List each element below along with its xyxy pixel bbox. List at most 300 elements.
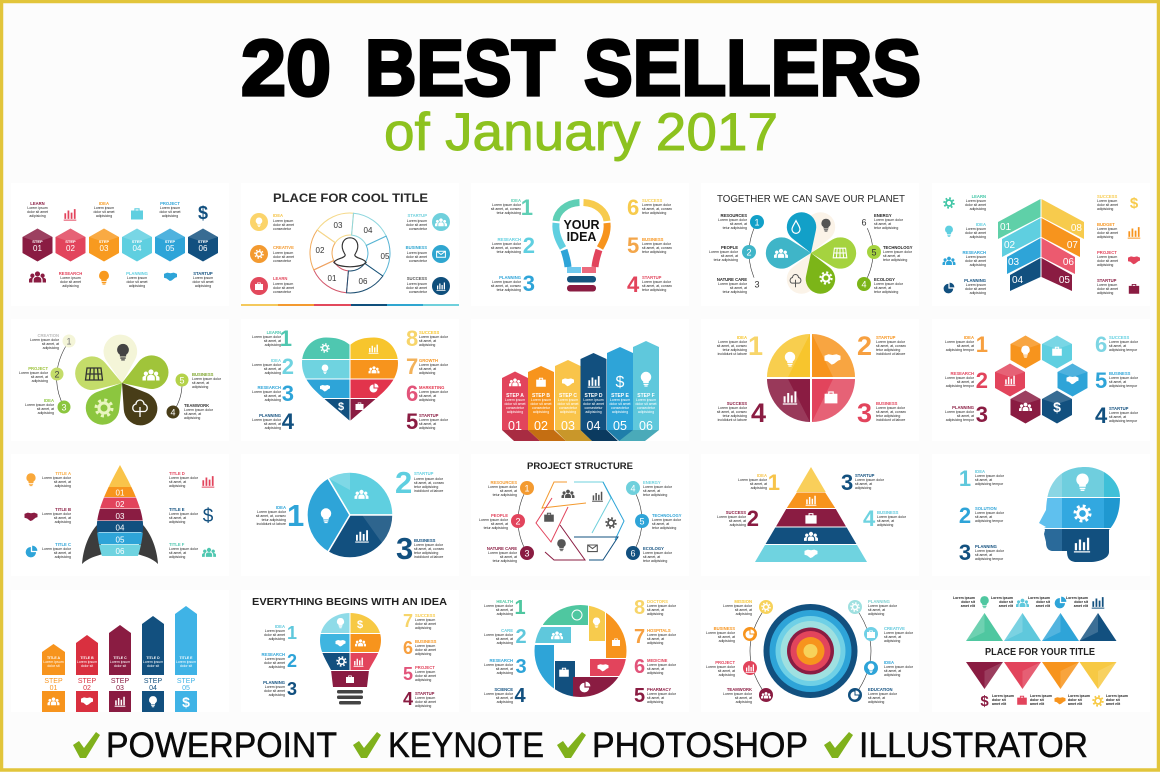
- right items: sit amet, at: [419, 339, 436, 343]
- left chevron stripes: 02: [1004, 240, 1016, 251]
- left items: 1: [514, 597, 526, 619]
- right items: SUCCESS: [1097, 194, 1117, 199]
- bottom icons and labels: dolor sit: [1068, 698, 1083, 702]
- left items: sit amet, at: [730, 222, 747, 226]
- item 1 idea: 1: [768, 470, 780, 495]
- bottom icons and labels: amet elit: [1030, 702, 1045, 706]
- right items: 4: [1095, 403, 1108, 428]
- left items: sit amet, at: [957, 380, 974, 384]
- panel: three-part pie: [241, 454, 459, 576]
- right items: adipisicing: [647, 671, 663, 675]
- left items: 4: [282, 409, 295, 434]
- left items: 2: [515, 516, 521, 526]
- right items: 7: [403, 611, 413, 631]
- item 4 business: [863, 506, 907, 531]
- left items: sit amet, at: [730, 286, 747, 290]
- right items: PHARMACY: [647, 687, 671, 692]
- numbered items: Lorem ipsum dolor: [30, 338, 59, 342]
- right items: [857, 213, 913, 294]
- left items: tetur adipisicing: [723, 226, 747, 230]
- panel: rocket: [24, 465, 216, 564]
- left items: 1: [754, 218, 760, 228]
- right items: dolor sit amet: [415, 648, 436, 652]
- bulb socket: [567, 276, 596, 292]
- right items: Lorem ipsum: [1097, 255, 1117, 259]
- six hexagons: [995, 336, 1088, 424]
- item 2 startup: tetur adipisicing: [876, 348, 900, 352]
- left items: 1: [976, 332, 988, 357]
- top labels and icons: amet elit: [1036, 604, 1051, 608]
- clover petals: [766, 208, 856, 298]
- top labels and icons: Lorem ipsum: [991, 596, 1013, 600]
- left items: Lorem ipsum dolor: [488, 485, 517, 489]
- right items: Lorem ipsum dolor: [419, 363, 448, 367]
- six step hexagons: STEP: [165, 239, 176, 244]
- right items: Lorem ipsum dolor: [884, 631, 913, 635]
- left items: dolor sit amet: [965, 203, 986, 207]
- right items: 5: [871, 248, 877, 258]
- right items: adipisicing: [884, 673, 900, 677]
- panel heading: PLACE FOR YOUR TITLE: [985, 647, 1095, 658]
- six step hexagons: STEP: [32, 239, 43, 244]
- six step columns: consectetur: [506, 406, 525, 410]
- panel: head profile: [959, 467, 1120, 562]
- left items: Lorem ipsum dolor: [252, 390, 281, 394]
- right items: 6: [634, 656, 645, 678]
- item 1 idea: IDEA: [757, 473, 767, 478]
- five arrows: dolor sit: [81, 664, 93, 668]
- left items: sit amet, at, consec: [491, 207, 521, 211]
- item 1 idea: IDEA: [276, 505, 286, 510]
- right items: sit amet, at: [884, 669, 901, 673]
- right items: SUCCESS: [419, 330, 439, 335]
- item 1 idea: sit amet, at: [750, 482, 767, 486]
- right items: TITLE E: [169, 507, 185, 512]
- right items: Lorem ipsum dolor: [647, 633, 676, 637]
- title: SELLERS: [584, 23, 921, 112]
- right items: sit amet, at: [1109, 380, 1126, 384]
- top labels and icons: dolor sit: [1036, 600, 1051, 604]
- right items: sit amet, at: [647, 696, 664, 700]
- right items: dolor sit amet: [1097, 287, 1118, 291]
- panel: hexagon ring: [932, 319, 1150, 441]
- item 3 business: sit amet, at, consec: [414, 547, 444, 551]
- right items: sit amet, at, consec: [642, 246, 672, 250]
- top labels and icons: amet elit: [999, 604, 1014, 608]
- item 2 startup: [857, 331, 906, 361]
- left items: NATURE CARE: [487, 546, 517, 551]
- left items: Lorem ipsum: [966, 283, 986, 287]
- item 2 startup: incididunt ut labore: [876, 352, 905, 356]
- right items: adipisicing: [1097, 235, 1113, 239]
- item 1 idea: IDEA: [737, 335, 747, 340]
- right items: sit amet, at: [419, 394, 436, 398]
- six step columns: Lorem ipsum: [505, 398, 525, 402]
- panel: your idea lightbulb: [471, 183, 689, 306]
- bottom icons and labels: amet elit: [1106, 702, 1121, 706]
- numbered items: CREATION: [37, 333, 59, 338]
- six step columns: Lorem ipsum: [558, 398, 578, 402]
- right items: sit amet, at: [884, 635, 901, 639]
- right items: dolor sit amet: [406, 223, 427, 227]
- panel: place for cool title ring: [241, 183, 459, 306]
- top labels and icons: dolor sit: [961, 600, 976, 604]
- left items: adipisicing: [265, 371, 281, 375]
- left items: PLANNING: [259, 413, 281, 418]
- panel: rising step columns: [502, 341, 659, 441]
- five arrows: dolor sit: [180, 664, 192, 668]
- bottom icons and labels: amet elit: [1068, 702, 1083, 706]
- left items: consectetur: [273, 227, 292, 231]
- right items: STARTUP: [408, 213, 427, 218]
- left items: HEALTH: [496, 599, 513, 604]
- left items: [262, 623, 297, 699]
- right items: dolor sit amet: [406, 286, 427, 290]
- right items: BUDGET: [1097, 222, 1115, 227]
- step labels: 02: [83, 685, 91, 692]
- segmented bulb: $: [357, 619, 363, 631]
- left items: dolor sit amet: [965, 287, 986, 291]
- item 2 success: 2: [747, 506, 759, 531]
- six step columns: adipisicing: [585, 410, 602, 414]
- left items: Lorem ipsum dolor: [718, 218, 747, 222]
- panel: four-quadrant circle: [701, 319, 919, 441]
- five arrows: TITLE E: [179, 656, 193, 660]
- left items: Lorem ipsum dolor: [252, 363, 281, 367]
- left items: BUSINESS: [714, 626, 735, 631]
- six step columns: 05: [613, 419, 627, 433]
- label: Illustrator: ILLUSTRATOR: [859, 726, 1088, 765]
- right items: 6: [627, 195, 639, 220]
- right items: $: [203, 506, 214, 527]
- left items: Lorem ipsum dolor: [42, 476, 71, 480]
- connector arcs: [750, 607, 871, 695]
- right items: sit amet, at: [169, 480, 186, 484]
- left items: [250, 213, 294, 295]
- title: [241, 23, 921, 112]
- left items: adipisicing: [736, 700, 752, 704]
- right items: Lorem ipsum: [1097, 283, 1117, 287]
- label: Keynote: KEYNOTE: [388, 726, 544, 765]
- ring of six outlined segments: 05: [381, 252, 390, 261]
- left items: 3: [524, 548, 530, 558]
- left items: [942, 194, 986, 295]
- right items: adipisicing: [415, 678, 431, 682]
- item 2 startup: sit amet, at, consec: [876, 344, 906, 348]
- six step hexagons: 05: [166, 244, 175, 253]
- item 1 idea: incididunt ut labore: [718, 352, 747, 356]
- left items: 3: [287, 679, 297, 699]
- item 3 business: Lorem ipsum dolor: [876, 406, 905, 410]
- item 1 idea: Lorem ipsum dolor: [257, 510, 286, 514]
- left items: Lorem ipsum dolor: [492, 203, 521, 207]
- left items: RESEARCH: [498, 237, 521, 242]
- numbered items: 1: [66, 336, 72, 346]
- item 2 startup: STARTUP: [414, 471, 434, 476]
- right items: Lorem ipsum dolor: [874, 282, 903, 286]
- left items: IDEA: [511, 198, 521, 203]
- left items: 2: [746, 248, 752, 258]
- bottom icons and labels: dolor sit: [992, 698, 1007, 702]
- left items: tetur adipisicing: [497, 288, 521, 292]
- bottom labels and icons: dolor sit amet: [126, 280, 148, 284]
- right items: dolor sit amet: [415, 674, 436, 678]
- left items: sit amet, at, consec: [491, 246, 521, 250]
- six step columns: STEP D: [585, 393, 603, 399]
- six step columns: adipisicing: [533, 410, 549, 414]
- five arrows: dolor sit: [47, 664, 60, 668]
- left items: TITLE C: [55, 542, 71, 547]
- left items: sit amet, at: [718, 635, 735, 639]
- left items: PLANNING: [964, 278, 986, 283]
- left items: consectetur: [273, 259, 292, 263]
- six hexagons: $: [1053, 399, 1061, 415]
- rocket body bands: 03: [116, 512, 125, 521]
- right items: MARKETING: [419, 385, 444, 390]
- six step columns: dolor sit amet: [609, 402, 631, 406]
- right items: Lorem ipsum dolor: [647, 604, 676, 608]
- left items: IDEA: [275, 624, 285, 629]
- right items: ECOLOGY: [874, 277, 895, 282]
- right items: Lorem ipsum dolor: [1109, 411, 1138, 415]
- item 2 startup: tetur adipisicing: [414, 485, 438, 489]
- right items: 8: [634, 597, 645, 619]
- item 2 success: adipisicing: [730, 523, 746, 527]
- ring of six outlined segments: 04: [364, 226, 373, 235]
- right items: sit amet, at: [874, 222, 891, 226]
- rocket body bands: 02: [116, 500, 125, 509]
- right items: dolor sit amet: [415, 700, 436, 704]
- outlined hexagon segments: [536, 482, 624, 560]
- left items: [706, 599, 773, 704]
- numbered items: Lorem ipsum dolor: [19, 371, 48, 375]
- left items: TEAMWORK: [727, 687, 752, 692]
- right items: consectetur: [409, 290, 428, 294]
- right items: consectetur: [409, 259, 428, 263]
- right items: tetur adipisicing: [642, 288, 666, 292]
- item 4 business: Lorem ipsum dolor: [877, 515, 906, 519]
- panel: together we can save our planet: [701, 183, 919, 306]
- left items: RESEARCH: [962, 250, 986, 255]
- ring of six outlined segments: 03: [334, 221, 343, 230]
- left items: Lorem ipsum: [966, 227, 986, 231]
- numbered items: sit amet, at: [192, 381, 209, 385]
- item 3 business: tetur adipisicing: [876, 414, 900, 418]
- right items: adipisicing: [868, 612, 884, 616]
- left items: adipisicing: [269, 693, 285, 697]
- top labels and icons: LEARN: [30, 201, 45, 206]
- left items: adipisicing: [497, 700, 513, 704]
- right items: sit amet, at: [647, 637, 664, 641]
- item 2 startup: 2: [857, 331, 872, 361]
- right items: adipisicing tempor: [1109, 348, 1138, 352]
- panel: hexagon steps timeline: [11, 183, 229, 306]
- left items: 1: [287, 623, 297, 643]
- right items: adipisicing: [169, 484, 185, 488]
- right items: SUCCESS: [407, 276, 427, 281]
- left items: adipisicing: [497, 671, 513, 675]
- right items: Lorem ipsum dolor: [643, 551, 672, 555]
- left items: Lorem ipsum dolor: [723, 604, 752, 608]
- right items: [169, 471, 216, 559]
- item 1 idea: sit amet, at, consec: [256, 514, 286, 518]
- right items: STARTUP: [415, 691, 435, 696]
- numbered items: 4: [170, 408, 176, 418]
- subtitle: of January 2017: [384, 103, 778, 162]
- right items: sit amet, at: [868, 608, 885, 612]
- bottom icons and labels: Lorem ipsum: [1030, 694, 1052, 698]
- item 2 success: Lorem ipsum dolor: [717, 515, 746, 519]
- step labels: STEP: [44, 678, 63, 685]
- six step columns: 04: [587, 419, 600, 433]
- item 3 business: BUSINESS: [414, 538, 436, 543]
- item 3 startup: [841, 470, 885, 495]
- right items: 6: [403, 638, 413, 658]
- left items: sit amet, at: [718, 669, 735, 673]
- icon squares: $: [182, 694, 190, 710]
- six step columns: STEP A: [506, 393, 524, 399]
- left items: sit amet, at: [491, 522, 508, 526]
- panel: chevron arrow layers: [932, 183, 1150, 306]
- check: PowerPoint: [73, 732, 100, 758]
- bottom labels and icons: Lorem ipsum: [127, 276, 147, 280]
- pie slices: [307, 472, 393, 558]
- right items: Lorem ipsum dolor: [419, 418, 448, 422]
- right items: adipisicing: [415, 626, 431, 630]
- numbered items: 5: [179, 376, 185, 386]
- numbered items: Lorem ipsum dolor: [25, 403, 54, 407]
- left items: dolor sit amet: [273, 286, 294, 290]
- right items: Lorem ipsum dolor: [642, 242, 671, 246]
- left items: Lorem ipsum dolor: [718, 282, 747, 286]
- six step columns: 03: [561, 419, 575, 433]
- item 1 idea: sit amet, at, consec: [717, 344, 747, 348]
- six step hexagons: 03: [100, 244, 109, 253]
- five arrows: dolor sit: [114, 664, 126, 668]
- panel: everything begins with an idea: [252, 598, 447, 708]
- item 1 idea: tetur adipisicing: [262, 518, 286, 522]
- item 3 startup: STARTUP: [855, 473, 875, 478]
- right items: [627, 195, 672, 297]
- right items: Lorem ipsum: [407, 251, 427, 255]
- right items: 5: [634, 685, 645, 707]
- top labels and icons: Lorem ipsum: [27, 206, 48, 210]
- right items: 5: [403, 664, 413, 684]
- right items: STARTUP: [419, 413, 439, 418]
- step labels: [44, 678, 195, 692]
- five arrows: TITLE C: [113, 656, 127, 660]
- right items: Lorem ipsum dolor: [652, 518, 681, 522]
- left items: 1: [280, 326, 292, 351]
- numbered items: adipisicing: [192, 385, 208, 389]
- six step columns: adipisicing: [638, 410, 654, 414]
- left items: CARE: [501, 628, 513, 633]
- item 3 business: tetur adipisicing: [414, 551, 438, 555]
- left items: Lorem ipsum: [273, 282, 293, 286]
- right items: adipisicing: [419, 398, 435, 402]
- left items: sit amet, at: [721, 254, 738, 258]
- six step columns: STEP F: [637, 393, 655, 399]
- right items: sit amet, at: [419, 422, 436, 426]
- right items: Lorem ipsum dolor: [642, 203, 671, 207]
- top labels and icons: Lorem ipsum: [953, 596, 975, 600]
- rocket fins: [82, 525, 158, 564]
- bottom labels and icons: adipisicing: [129, 284, 145, 288]
- left items: sit amet, at, consec: [491, 284, 521, 288]
- top labels and icons: [953, 596, 1104, 609]
- right items: [1095, 332, 1139, 428]
- top labels and icons: IDEA: [99, 201, 109, 206]
- pinwheel segments: [534, 605, 627, 698]
- item 3 startup: sit amet, at: [855, 482, 872, 486]
- left items: 3: [976, 402, 988, 427]
- right items: Lorem ipsum: [1097, 199, 1117, 203]
- left items: Lorem ipsum dolor: [42, 512, 71, 516]
- top labels and icons: dolor sit amet: [159, 210, 181, 214]
- six step columns: dolor sit amet: [504, 402, 526, 406]
- right items: [406, 213, 450, 295]
- numbered items: IDEA: [44, 398, 54, 403]
- right items: SUCCESS: [642, 198, 662, 203]
- bottom labels and icons: RESEARCH: [59, 271, 82, 276]
- six step columns: Lorem ipsum: [583, 398, 604, 402]
- right items: 7: [406, 354, 418, 379]
- six step columns: dolor sit amet: [557, 402, 579, 406]
- left items: IDEA: [271, 358, 281, 363]
- check: Illustrator: [824, 732, 853, 758]
- right items: 7: [634, 626, 645, 648]
- right items: dolor sit amet: [1097, 259, 1118, 263]
- six step columns: consectetur: [637, 406, 656, 410]
- bottom labels and icons: adipisicing: [195, 284, 211, 288]
- right items: TITLE F: [169, 542, 185, 547]
- right items: ENERGY: [874, 213, 892, 218]
- left items: adipisicing: [269, 665, 285, 669]
- left items: adipisicing: [736, 612, 752, 616]
- six step columns: adipisicing: [560, 410, 576, 414]
- bottom labels and icons: dolor sit amet: [60, 280, 81, 284]
- right items: STARTUP: [1097, 278, 1117, 283]
- left items: tetur adipisicing: [493, 493, 517, 497]
- items: 3: [959, 540, 971, 565]
- bottom icons and labels: Lorem ipsum: [1106, 694, 1128, 698]
- left items: sit amet, at: [54, 551, 71, 555]
- left items: adipisicing tempor: [946, 348, 975, 352]
- top labels and icons: amet elit: [1074, 604, 1089, 608]
- panel: project structure hexagon: [471, 454, 689, 576]
- bottom labels and icons: dolor sit amet: [192, 280, 214, 284]
- right items: sit amet, at: [643, 489, 660, 493]
- right items: SUCCESS: [415, 613, 435, 618]
- item 2 success: SUCCESS: [726, 510, 746, 515]
- top labels and icons: PROJECT: [160, 201, 180, 206]
- item 2 startup: Lorem ipsum dolor: [414, 477, 443, 481]
- left items: Lorem ipsum: [265, 629, 285, 633]
- right items: sit amet, at, consec: [642, 284, 672, 288]
- bottom labels and icons: [29, 271, 214, 288]
- left items: sit amet, at: [54, 516, 71, 520]
- left items: [491, 195, 535, 296]
- left items: sit amet, at: [496, 696, 513, 700]
- item 1 idea: 1: [748, 331, 763, 361]
- panel heading: PLACE FOR COOL TITLE: [273, 191, 428, 205]
- right items: Lorem ipsum dolor: [169, 512, 198, 516]
- panel: green flower: [11, 319, 229, 441]
- panel: medical pinwheel circle: [484, 600, 676, 704]
- bottom icons and labels: dolor sit: [1106, 698, 1121, 702]
- item 2 startup: incididunt ut labore: [414, 489, 443, 493]
- left items: adipisicing: [719, 673, 735, 677]
